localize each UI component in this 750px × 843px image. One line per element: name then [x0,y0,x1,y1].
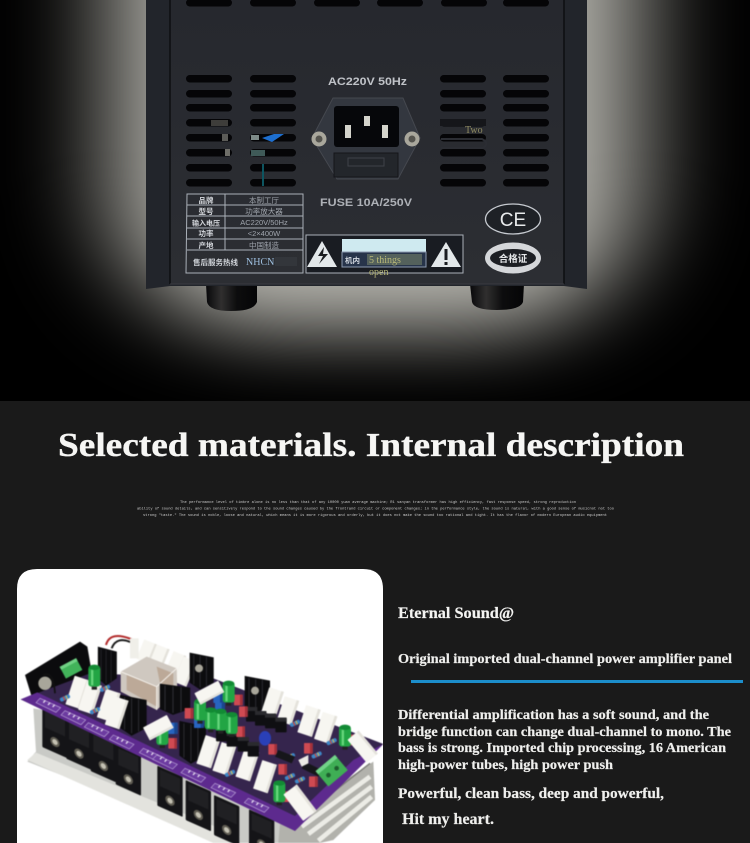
screw and fan wires [38,636,139,693]
relay block [121,657,177,710]
overlay text: Two: Two [465,125,483,136]
specification table: 本制工厅 [249,195,279,205]
circuit board [21,673,383,831]
cooling fan [25,642,93,707]
text block: intro description [137,500,614,518]
white film capacitors, rear row [136,639,196,687]
specification table: 中国制造 [249,240,279,250]
specification table: 功率放大器 [245,206,283,216]
label: AC220V 50Hz: AC220V 50Hz [328,76,408,88]
white film capacitors, front row [65,676,337,793]
rubber feet [206,284,524,311]
text block: amplifier features: high-power tubes, high power push [398,758,613,773]
text block: intro description: The performance level of timbre alone is no less than that of any 10000 yuan average machine; R1 sanyan transformer has high efficiency, fast response speed, strong reproduction [180,500,576,505]
label: fuse rating: FUSE 10A/250V [320,197,413,209]
text block: powerful bass: Powerful, clean bass, deep and powerful, [398,786,664,802]
closing line: Hit my heart. [402,811,494,828]
panel: rear view of amplifier [0,0,750,401]
heading: Eternal Sound@: Eternal Sound@ [398,605,514,622]
text block: amplifier features: bridge function can change dual-channel to mono. The [398,725,731,740]
text block: intro description: strong "taste." The sound is noble, loose and natural, which means it is more rigorous and orderly, but it does not make the sound too rational and tight. It has the flavor of modern European audio equipment [143,513,607,518]
specification table: AC220V/50Hz [240,218,288,227]
blue divider line [411,680,743,683]
specification table: <2×400W [248,229,281,238]
text block: amplifier features [398,708,731,773]
overlay text: 5 things open: 5 things [369,255,401,266]
certificate seal: 合格证 [499,253,528,265]
CE mark [486,204,540,234]
aluminium heat sink base [27,708,375,843]
title: Selected materials. Internal description [58,427,684,464]
warning label: 机内 [345,255,360,265]
CE mark: CE [500,210,526,231]
green screw terminal [316,755,348,786]
small signal parts [59,684,356,802]
text block: intro description: ability of sound details, and can sensitively respond to the sound changes caused by the frontrand circuit or component changes; in the performance style, the sound is natural, with a good sense of musicnot not too [137,506,614,512]
certificate seal [485,242,541,274]
overlay text line two: open [369,267,388,278]
photo card: amplifier circuit board [17,569,383,843]
subheading: panel description: Original imported dual-channel power amplifier panel [398,652,732,667]
specification table: 功率 [198,228,214,238]
specification table: 输入电压 [192,218,220,228]
warning label [306,235,463,273]
green terminal, fan side [60,658,82,679]
power inlet socket with fuse holder [312,98,420,179]
specification table: 型号 [198,206,214,216]
spotlight backdrop [0,0,750,401]
specification table: 品牌 [198,195,214,205]
specification table: NHCN [246,257,274,268]
green electrolytic capacitors [88,665,351,805]
power transistors [42,707,274,843]
heat sinks [98,647,270,764]
solder pads [36,698,269,812]
ventilation slots [186,0,549,186]
specification table: 售后服务热线 [193,257,238,267]
cement resistors [143,681,378,821]
text block: amplifier features: bass is strong. Imported chip processing, 16 American [398,741,726,756]
specification table [186,194,303,273]
specification table: 产地 [198,240,214,250]
chassis [146,0,587,289]
text block: amplifier features: Differential amplification has a soft sound, and the [398,708,709,723]
